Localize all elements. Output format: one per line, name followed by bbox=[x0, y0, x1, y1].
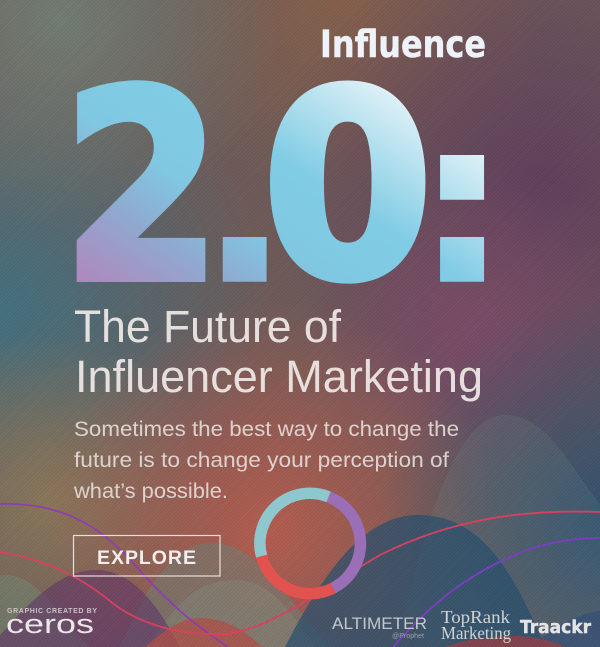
subtitle: The Future of Influencer Marketing: Influencer Marketing bbox=[75, 351, 483, 402]
subtitle: The Future of Influencer Marketing: The Future of bbox=[74, 301, 341, 352]
credit: graphic created by ceros: ceros bbox=[6, 609, 94, 639]
description text: what’s possible. bbox=[73, 480, 228, 503]
partner logos: Marketing bbox=[441, 623, 511, 643]
heading: Influence: Influence bbox=[320, 23, 486, 66]
description text: future is to change your perception of bbox=[74, 449, 449, 472]
explore button: EXPLORE bbox=[97, 547, 196, 569]
heading: 2.0: bbox=[76, 80, 484, 284]
partner logos: @Prophet bbox=[392, 633, 424, 640]
partner logos: Traackr bbox=[520, 617, 591, 638]
partner logos: TopRank bbox=[441, 607, 510, 627]
partner logos: ALTIMETER bbox=[332, 614, 427, 633]
credit: graphic created by ceros: GRAPHIC CREATED BY bbox=[7, 608, 97, 615]
description text: Sometimes the best way to change the bbox=[74, 418, 459, 441]
